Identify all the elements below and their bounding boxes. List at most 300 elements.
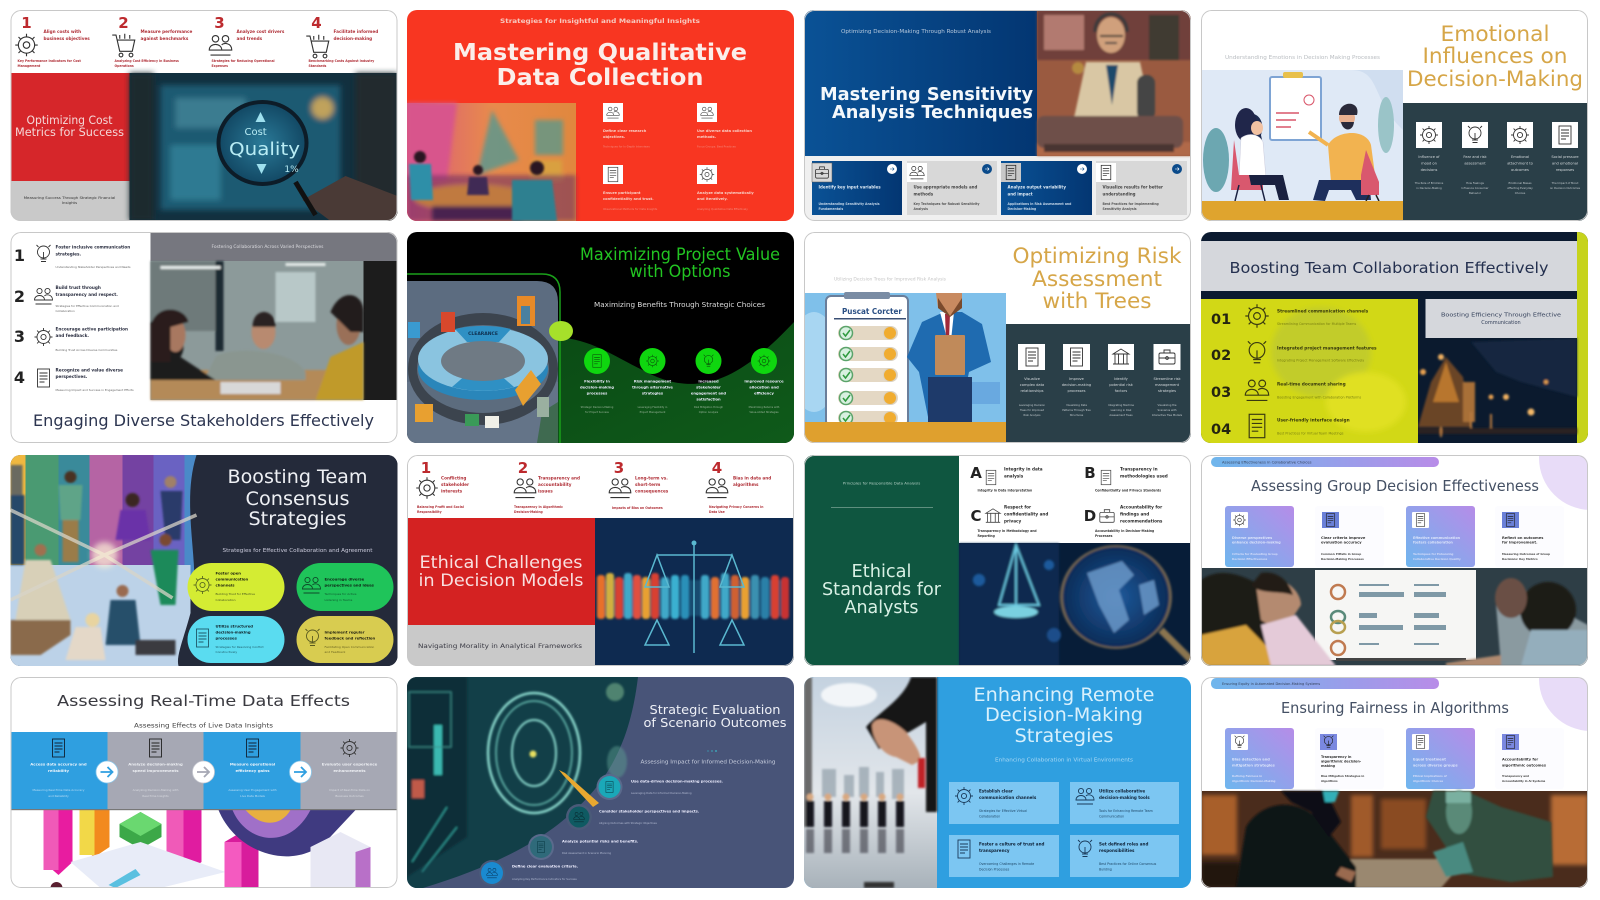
category pill: [1211, 457, 1439, 467]
list item 01: Streamlining Communication for Multiple Teams: [1277, 322, 1356, 326]
icon column 4: management: [1155, 383, 1180, 387]
photo: magnifier over quality dashboard: 1%: [284, 165, 299, 175]
illustration: team pulling ropes: [10, 455, 398, 666]
box: defined roles: Best Practices for Online Consensus: [1099, 862, 1157, 866]
step 2: [112, 14, 192, 68]
icon column 2: Structures: [1070, 413, 1084, 417]
icon column 2: Visualizing Data: [1066, 403, 1087, 407]
subtitle: Optimizing Decision-Making Through Robust Analysis: [841, 29, 991, 35]
subtitle box: [1426, 299, 1577, 338]
panel: Mastering Sensitivity Analysis Techniques: [804, 10, 1191, 221]
title: Mastering Sensitivity: [820, 84, 1033, 105]
icon column 3: factors: [1115, 389, 1127, 393]
card: reflect on outcomes: [1495, 506, 1564, 567]
challenge 4: Data Use: [709, 510, 725, 514]
icon column 1: The Role of Emotions: [1414, 181, 1444, 185]
item 2: [14, 285, 119, 313]
card: reflect on outcomes: Measuring Outcomes of Group: [1502, 552, 1550, 556]
item: diverse methods: Focus Groups: Best Practices: [697, 144, 736, 148]
arrow 3: [290, 761, 312, 783]
card: output variability: Applications in Risk Assessment and: [1008, 202, 1071, 206]
item 1: 1: [14, 246, 25, 265]
card: identify variables: Fundamentals: [818, 207, 843, 211]
step 3: and trends: [236, 36, 263, 41]
title: Decision-Making: [1407, 67, 1583, 92]
card: accountability: algorithmic outcomes: [1502, 764, 1546, 768]
card: reflect on outcomes: for improvement.: [1502, 540, 1537, 544]
feature: resource allocation: Improved resource: [744, 380, 784, 384]
card: diverse perspectives: enhance decision-making: [1232, 540, 1281, 544]
step 3: Strategies for Reducing Operational: [212, 59, 275, 63]
card: transparency: Transparency in: [1321, 755, 1352, 759]
icon column 1: complex data: [1020, 383, 1044, 387]
item: diverse methods: methods.: [697, 135, 716, 139]
box: culture of trust: Decision Processes: [979, 868, 1010, 872]
list item 03: Boosting Engagement with Collaboration Platforms: [1277, 396, 1361, 400]
card: transparency: making: [1321, 764, 1336, 768]
card: appropriate models: methods: [914, 192, 934, 196]
panel: Strategic Evaluation of Scenario Outcomes: [407, 677, 794, 888]
box: defined roles: Building: [1099, 868, 1112, 872]
photo: executive beside a robot: [1201, 790, 1588, 888]
principle D: Accountability for: [1120, 504, 1163, 510]
principle C: Transparency in Methodology and: [978, 529, 1037, 533]
title: with Trees: [1042, 289, 1152, 314]
challenge 1: Conflicting: [441, 476, 466, 480]
challenge 3: Long-term vs.: [635, 476, 668, 480]
title: Optimizing Cost: [26, 113, 113, 127]
box: culture of trust: transparency: [979, 848, 1010, 853]
step: analyze speed: [108, 732, 204, 810]
icon column 4: Interactive Tree Models: [1152, 413, 1183, 417]
feature: stakeholder engagement: [691, 348, 726, 414]
principle B: B: [1084, 464, 1096, 482]
icon column 4: and emotional: [1552, 162, 1578, 166]
icon column 3: [1108, 344, 1134, 417]
step 4: [306, 14, 378, 68]
chalkboard image with target rings: [407, 677, 638, 888]
red title block: [407, 518, 595, 625]
principle C: Respect for: [1004, 504, 1032, 510]
feature: stakeholder engagement: Risk Mitigation through: [694, 405, 723, 409]
box: collaborative tools: Tools for Enhancing Remote Team: [1098, 809, 1153, 813]
principle A: Integrity in data: [1004, 466, 1043, 472]
arrow 2: [192, 761, 214, 783]
title: Consensus: [246, 488, 350, 510]
card: clear criteria: Common Pitfalls in Group: [1321, 552, 1361, 556]
icon column 4: [1152, 344, 1183, 417]
list item 04: User-friendly interface design: [1277, 418, 1350, 424]
step 1: Management: [18, 64, 41, 68]
icon column 1: Trees for Improved: [1020, 408, 1044, 412]
principle D: [1084, 504, 1163, 538]
item 1: strategies.: [56, 252, 81, 256]
principle B: Confidentiality and Privacy Standards: [1095, 488, 1161, 492]
challenge 1: Balancing Profit and Social: [417, 505, 464, 509]
box: clear channels: Strategies for Effective Virtual: [979, 809, 1027, 813]
box: collaborative tools: [1070, 782, 1179, 824]
step: efficiency gains: Live Data Models: [240, 794, 265, 798]
item: analyze data: Analyze data systematically: [697, 191, 754, 195]
photo: team reviewing a dashboard: [1201, 568, 1588, 666]
box: collaborative tools: decision-making tools: [1099, 795, 1150, 800]
item: define objectives: Techniques for In-Depth Interviews: [602, 144, 650, 148]
grey header band: [150, 232, 398, 261]
item 1: [14, 244, 131, 269]
title: of Scenario Outcomes: [644, 716, 786, 730]
step 4: Facilitate informed: [334, 29, 378, 34]
panel: Mastering Qualitative Data Collection: [407, 10, 794, 221]
icon column 4: Scenarios with: [1158, 408, 1177, 412]
icon column 2: How Feelings: [1466, 181, 1484, 185]
icon column 4: Streamline risk: [1153, 377, 1181, 381]
box: clear channels: Collaboration: [979, 814, 1000, 818]
list item 02: Integrated project management features: [1277, 346, 1377, 352]
step: analyze speed: Analyzing Decision-Making with: [133, 788, 179, 792]
item 3: [14, 326, 128, 352]
item: confidentiality: [603, 165, 658, 211]
step: analyze speed: Analyze decision-making: [128, 762, 183, 766]
card: identify variables: Identify key input variables: [818, 184, 881, 190]
card: accountability: Accountability in AI Systems: [1502, 779, 1546, 783]
arrow 1: [96, 761, 118, 783]
icon column 2: Patterns Through Tree: [1062, 408, 1091, 412]
step: user experience: [300, 732, 398, 810]
icon column 4: on Decision Outcomes: [1550, 186, 1581, 190]
panel: Ethical Challenges in Decision Models: [407, 455, 794, 666]
item 2: Strategies for Effective Communication and: [56, 304, 119, 308]
title: Assessing Real-Time Data Effects: [57, 692, 350, 710]
challenge 2: Decision-Making: [514, 510, 543, 514]
subtitle: Maximizing Benefits Through Strategic Choices: [594, 301, 765, 309]
gold footer strip: [804, 422, 1006, 443]
challenge 1: [416, 459, 470, 514]
step 1: Key Performance Indicators for Cost: [18, 59, 81, 63]
panel: Ensuring Fairness in Algorithms: [1201, 627, 1600, 888]
grey subtitle block: [407, 625, 595, 666]
item: analyze data: Analyzing Qualitative Data Effectively: [697, 207, 748, 211]
card: equal treatment: Ethical Implications of: [1413, 774, 1448, 778]
pill: open channels: [188, 563, 284, 611]
subtitle: Principles for Responsible Data Analysis: [843, 480, 920, 486]
pill: structured processes: Strategies for Resolving Conflict: [216, 645, 264, 649]
icon column 1: decisions: [1421, 168, 1437, 172]
subtitle: Assessing Effects of Live Data Insights: [134, 722, 273, 730]
photo: magnifier over quality dashboard: [130, 73, 398, 221]
card: bias detection: Defining Fairness in: [1232, 774, 1262, 778]
subtitle: Assessing Impact for Informed Decision-Making: [640, 760, 776, 766]
category pill: [1211, 678, 1439, 689]
subtitle: Strategies for Effective Collaboration and Agreement: [222, 548, 373, 554]
title: Ethical: [852, 562, 912, 582]
icon column 2: Behavior: [1469, 191, 1482, 195]
title: Mastering Qualitative: [453, 40, 747, 66]
step 2: Measure performance: [140, 29, 192, 34]
step 1: 1: [21, 14, 32, 32]
pill: structured processes: processes: [216, 636, 238, 640]
icon column 3: attachment to: [1507, 162, 1533, 166]
feature: stakeholder engagement: stakeholder: [696, 386, 721, 390]
principle D: recommendations: [1120, 518, 1163, 524]
list item 02: [1211, 341, 1377, 364]
subtitle: Utilizing Decision Trees for Improved Risk Analysis: [834, 276, 947, 282]
step 4: Standards: [308, 64, 327, 68]
item 4: perspectives.: [56, 374, 88, 379]
card: effective communication: Collaborative Decision Quality: [1413, 557, 1461, 561]
item: stakeholder perspectives: [566, 804, 700, 830]
box: collaborative tools: Communication: [1099, 814, 1124, 818]
list item 02: 02: [1211, 348, 1231, 364]
item: evaluation criteria: [479, 860, 579, 886]
feature: stakeholder engagement: satisfaction: [696, 398, 721, 402]
item: confidentiality: Observational Methods for Data Insights: [603, 207, 658, 211]
principle B: Transparency in: [1120, 466, 1158, 472]
challenge 1: 1: [421, 459, 431, 477]
item: define objectives: Define clear research: [603, 129, 647, 133]
pill: structured processes: Utilize structured: [216, 624, 253, 628]
icon column 2: assessment: [1464, 162, 1486, 166]
subtitle: Understanding Emotions in Decision Making Processes: [1225, 55, 1380, 61]
icon column 3: Choices: [1515, 191, 1526, 195]
feature: stakeholder engagement: Option Analysis: [699, 410, 719, 414]
feature: risk management: Risk management: [634, 380, 671, 384]
pill: feedback: Facilitating Open Communication: [324, 645, 374, 649]
icon column 2: [1062, 344, 1091, 417]
step 2: 2: [118, 14, 129, 32]
list item 04: [1211, 414, 1350, 438]
box: defined roles: Set defined roles and: [1099, 842, 1148, 846]
principle D: D: [1084, 507, 1096, 525]
challenge 2: Transparency in Algorithmic: [514, 505, 563, 509]
step: access data: and Reliability: [48, 794, 69, 798]
item: data-driven: Leveraging Data for Informed Decision-Making: [631, 791, 692, 795]
item: risks and benefits: Analyze potential risks and benefits.: [562, 840, 639, 844]
title: Ensuring Fairness in Algorithms: [1281, 699, 1509, 717]
icon column 1: mood on: [1421, 162, 1437, 166]
icon column 1: Leveraging Decision: [1019, 403, 1046, 407]
step: efficiency gains: Measure operational: [230, 762, 275, 766]
card: visualize results: Best Practices for Implementing: [1102, 202, 1159, 206]
card: equal treatment: across diverse groups: [1413, 764, 1458, 768]
list item 02: Integrating Project Management Software Effectively: [1277, 358, 1364, 362]
subtitle: Measuring Success Through Strategic Financial: [24, 195, 115, 200]
feature: risk management: Leveraging Flexibility in: [638, 405, 668, 409]
icon column 3: Emotional Biases: [1508, 181, 1532, 185]
title: Emotional: [1440, 22, 1550, 47]
icon column 3: Emotional: [1511, 155, 1529, 159]
feature: flexibility: [580, 348, 614, 414]
feature: flexibility: Strategic Decision-Making: [581, 405, 614, 409]
principle C: C: [970, 507, 982, 525]
challenge 3: consequences: [635, 488, 669, 494]
card: appropriate models: Analysis: [914, 207, 928, 211]
feature: resource allocation: efficiency: [754, 392, 774, 396]
icon column 3: outcomes: [1511, 168, 1529, 172]
icon column 1: [1018, 344, 1046, 417]
card: diverse perspectives: Criteria for Evaluating Group: [1232, 552, 1278, 556]
red title block: [10, 73, 130, 181]
pill: feedback: Implement regular: [324, 630, 365, 634]
step 4: Benchmarking Costs Against Industry: [308, 59, 374, 63]
challenge 1: interests: [441, 488, 463, 494]
principle C: [970, 504, 1048, 538]
icon column 4: Visualizing the: [1158, 403, 1177, 407]
title: Optimizing Risk: [1012, 244, 1182, 269]
green side panel: [804, 455, 959, 666]
pill: open channels: Foster open: [216, 570, 241, 576]
icon column 3: Learning in Risk: [1111, 408, 1132, 412]
step 1: business objectives: [44, 36, 90, 41]
grey title band: [1201, 241, 1577, 291]
title: Strategies: [248, 508, 346, 530]
card: diverse perspectives: Diverse perspectives: [1232, 536, 1272, 540]
card: accountability: Transparency and: [1502, 774, 1529, 778]
pill: diverse perspectives: Encourage diverse: [324, 576, 365, 582]
card: output variability: [1001, 161, 1092, 215]
item 2: 2: [14, 287, 25, 306]
challenge 1: stakeholder: [441, 482, 470, 487]
card: output variability: Analyze output variability: [1008, 184, 1066, 190]
panel: Emotional Influences on Decision-Making: [1201, 10, 1588, 221]
gold footer strip: [1201, 201, 1403, 221]
card: output variability: and impact: [1008, 192, 1033, 196]
dark info panel: [1006, 324, 1191, 443]
icon column 2: processes: [1068, 389, 1086, 393]
feature: risk management: strategies: [642, 392, 664, 396]
step 1: Align costs with: [44, 29, 81, 34]
principle A: analysis: [1004, 474, 1024, 478]
principle C: confidentiality and: [1004, 512, 1048, 516]
pill: open channels: channels: [216, 582, 235, 588]
icon column 4: The Impact of Mood: [1551, 181, 1579, 185]
box: defined roles: [1070, 835, 1179, 877]
icon column 3: Identify: [1114, 377, 1129, 381]
title: in Decision Models: [418, 571, 584, 591]
title: Boosting Team: [228, 466, 368, 488]
panel: Engaging Diverse Stakeholders Effectively: [10, 232, 398, 443]
box: defined roles: responsibilities: [1099, 848, 1135, 853]
panel: Enhancing Remote Decision-Making Strategies: [804, 677, 1191, 888]
title: Strategies: [1014, 725, 1114, 747]
icon column 2: [1462, 122, 1489, 195]
subtitle: Insights: [62, 200, 77, 205]
list item 04: 04: [1211, 422, 1231, 438]
list item 04: Best Practices for Virtual Team Meetings: [1277, 432, 1344, 436]
step 2: Operations: [114, 64, 134, 68]
item: confidentiality: confidentiality and trust.: [603, 197, 654, 201]
challenge 2: 2: [518, 459, 528, 477]
item 4: 4: [14, 368, 25, 387]
icon column 4: strategies: [1158, 389, 1176, 393]
challenge 3: 3: [614, 459, 624, 477]
item 3: Encourage active participation: [56, 326, 128, 332]
photo: hand choosing red figure: [804, 677, 937, 888]
card: appropriate models: Use appropriate models and: [914, 184, 977, 190]
card: clear criteria: Decision-Making Processes: [1321, 557, 1364, 561]
pill: open channels: communication: [216, 576, 249, 582]
subtitle: Navigating Morality in Analytical Frameworks: [418, 643, 582, 650]
item: diverse methods: Use diverse data collection: [697, 129, 752, 133]
step: user experience: Evaluate user experience: [322, 762, 378, 766]
photo: magnifier over quality dashboard: Quality: [229, 139, 300, 160]
subtitle box: Communication: [1481, 320, 1521, 326]
step: analyze speed: speed improvements: [132, 768, 179, 773]
card: equal treatment: [1406, 728, 1475, 789]
image: circular road diagram: CLEARANCE: [468, 331, 498, 337]
pill: diverse perspectives: [296, 563, 394, 611]
image: circular road diagram: [407, 274, 573, 443]
title: with Options: [630, 262, 730, 281]
panel: Optimizing Risk Assessment with Trees: [789, 232, 1191, 443]
item 4: [14, 368, 134, 392]
subtitle: Strategies for Insightful and Meaningful Insights: [500, 18, 700, 25]
illustration: two people reviewing a clipboard: [1201, 70, 1403, 201]
list item 03: [1211, 380, 1361, 401]
feature: resource allocation: allocation and: [749, 386, 779, 390]
step 4: decision-making: [334, 36, 372, 41]
challenge 3: short-term: [635, 482, 661, 487]
title: Strategic Evaluation: [650, 703, 780, 717]
yellow list panel: [1201, 299, 1418, 443]
pill: feedback: and Feedback: [324, 650, 346, 654]
card: equal treatment: Equal treatment: [1413, 758, 1446, 762]
card: effective communication: Effective communication: [1413, 536, 1461, 540]
step 2: against benchmarks: [140, 36, 189, 41]
photo: hand moving a chess piece among lights: [1418, 338, 1577, 443]
feature: resource allocation: Value-Added Strategies: [749, 410, 779, 414]
feature: stakeholder engagement: engagement and: [691, 392, 726, 396]
principle A: [970, 464, 1043, 492]
list item 03: Real-time document sharing: [1277, 382, 1346, 388]
card: bias detection: Algorithmic Decision-Making: [1232, 779, 1276, 783]
item: confidentiality: Ensure participant: [603, 191, 641, 195]
item 3: Building Trust Across Diverse Communities: [56, 348, 118, 352]
icon column 1: Visualize: [1024, 377, 1041, 381]
title: Analysts: [844, 598, 918, 618]
title: Decision-Making: [985, 704, 1143, 726]
card: bias detection: [1225, 728, 1294, 789]
icon column 1: Influence of: [1418, 155, 1440, 159]
challenge 2: [514, 459, 580, 514]
item 2: transparency and respect.: [56, 292, 118, 297]
card: bias detection: mitigation strategies: [1232, 764, 1275, 768]
photo: meeting at a table: [150, 261, 398, 400]
challenge 3: Impacts of Bias on Outcomes: [612, 506, 663, 510]
card: appropriate models: [907, 161, 997, 215]
step 3: 3: [214, 14, 225, 32]
photo: clay figure at microphone: [1037, 10, 1191, 156]
title: Boosting Team Collaboration Effectively: [1230, 259, 1548, 277]
feature: flexibility: processes: [587, 392, 608, 396]
item: data-driven: Use data-driven decision-making processes.: [631, 780, 724, 784]
card: clear criteria: Clear criteria improve: [1321, 536, 1366, 540]
card: transparency: Bias Mitigation Strategies in: [1321, 774, 1364, 778]
photo: scales of justice over figures: [595, 518, 794, 666]
photo: magnifier over quality dashboard: Cost: [244, 127, 267, 138]
grey subtitle block: [10, 181, 130, 221]
icon column 3: [1507, 122, 1533, 195]
card: accountability: [1495, 728, 1564, 789]
panel: Maximizing Project Value with Options: [407, 232, 794, 443]
step: analyze speed: Real-Time Insights: [142, 794, 169, 798]
challenge 1: Responsibility: [417, 510, 442, 514]
icon column 3: Assessment Trees: [1109, 413, 1133, 417]
item 3: and feedback.: [56, 333, 89, 338]
pill: diverse perspectives: Listening in Teams: [324, 598, 353, 602]
icon column 3: Affecting Everyday: [1507, 186, 1533, 190]
box: collaborative tools: Utilize collaborative: [1099, 788, 1145, 794]
card: effective communication: fosters collaboration: [1413, 540, 1453, 544]
